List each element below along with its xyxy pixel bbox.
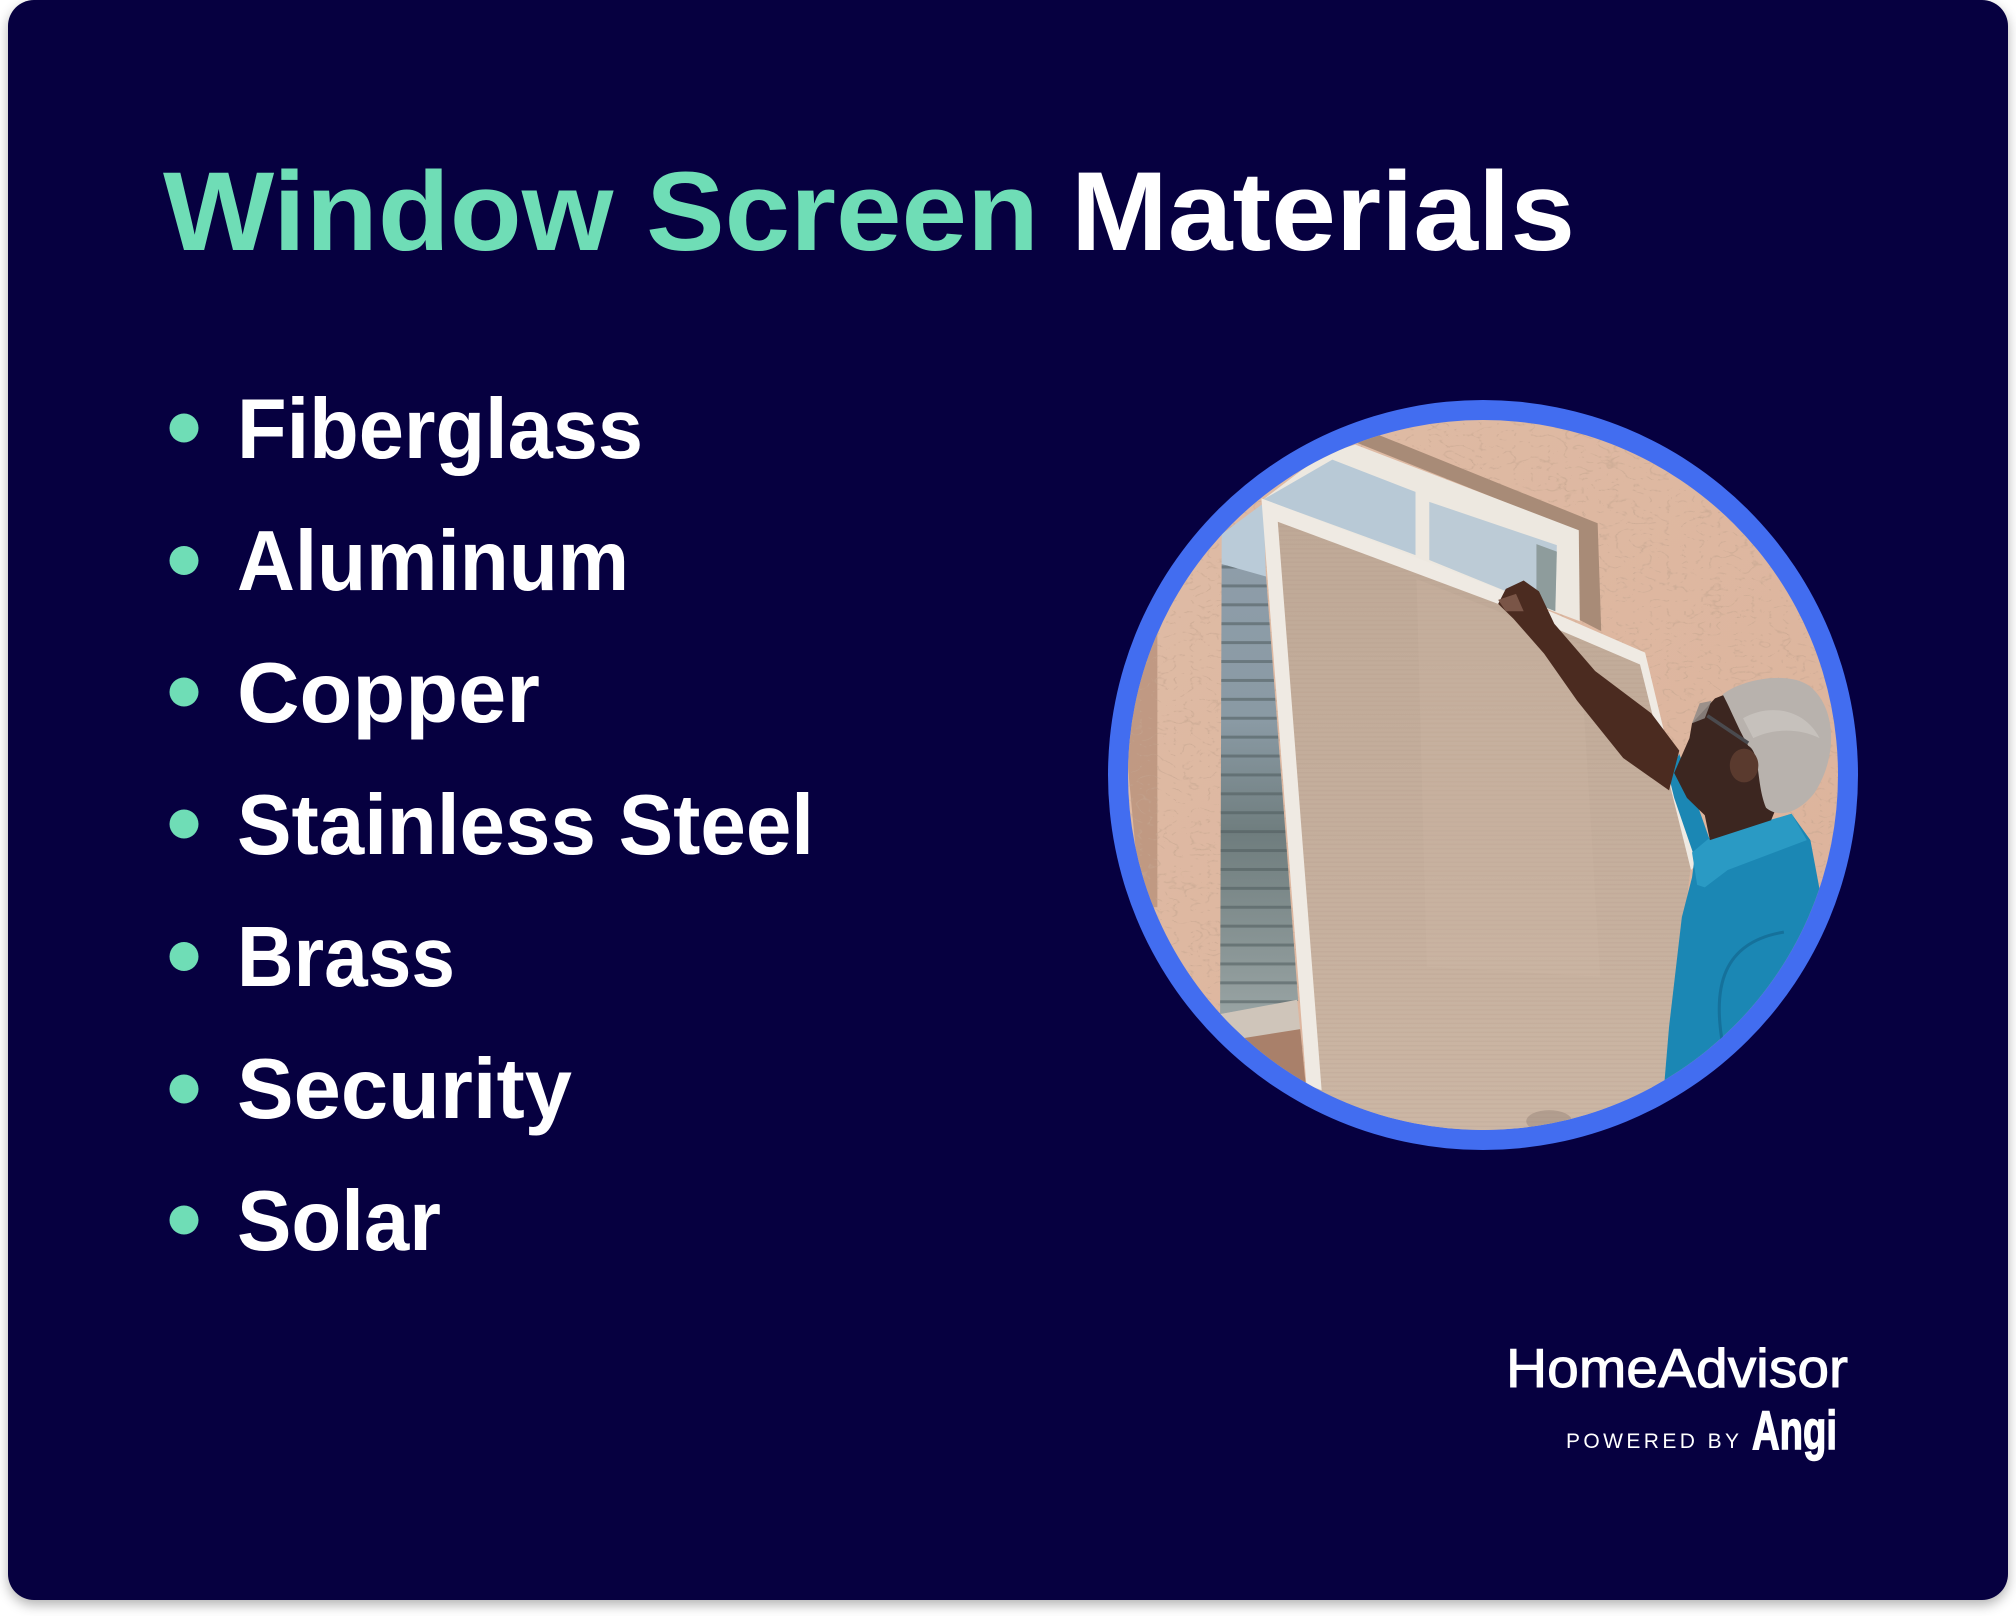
window recess — [1355, 434, 1601, 631]
window frame — [1263, 445, 1580, 621]
sill — [1220, 1000, 1300, 1042]
screen mesh — [1278, 522, 1691, 1176]
list item: Aluminum: Aluminum — [237, 514, 629, 609]
list item: Brass: Brass — [237, 910, 455, 1005]
blinds — [1220, 564, 1298, 1014]
title — [163, 149, 1575, 274]
screen frame — [1261, 498, 1696, 1090]
title: Materials — [1071, 149, 1575, 274]
materials list — [170, 382, 814, 1269]
upper glass panes — [1263, 460, 1416, 555]
list item: Security: Security — [237, 1042, 572, 1137]
photo: man fitting a window screen, in blue ring — [1108, 400, 1858, 1150]
logo: HomeAdvisor powered by Angi — [1506, 1337, 1848, 1461]
arm — [1498, 580, 1679, 790]
glasses — [1707, 716, 1748, 743]
title: Window Screen — [163, 149, 1039, 274]
neck and face — [1674, 683, 1776, 840]
wordmark: HomeAdvisor: HomeAdvisor — [1506, 1337, 1848, 1399]
infographic artwork — [163, 168, 1858, 1462]
hair — [1723, 678, 1831, 813]
shirt — [1664, 754, 1820, 1080]
list item: Fiberglass: Fiberglass — [237, 382, 643, 477]
list item: Copper: Copper — [237, 646, 540, 741]
tagline: powered by: POWERED BY — [1566, 1430, 1739, 1453]
wall — [1128, 420, 1838, 1130]
list item: Solar: Solar — [237, 1174, 441, 1269]
ear — [1730, 749, 1758, 782]
list item: Stainless Steel: Stainless Steel — [237, 778, 814, 873]
wordmark: Angi: Angi — [1752, 1399, 1837, 1461]
